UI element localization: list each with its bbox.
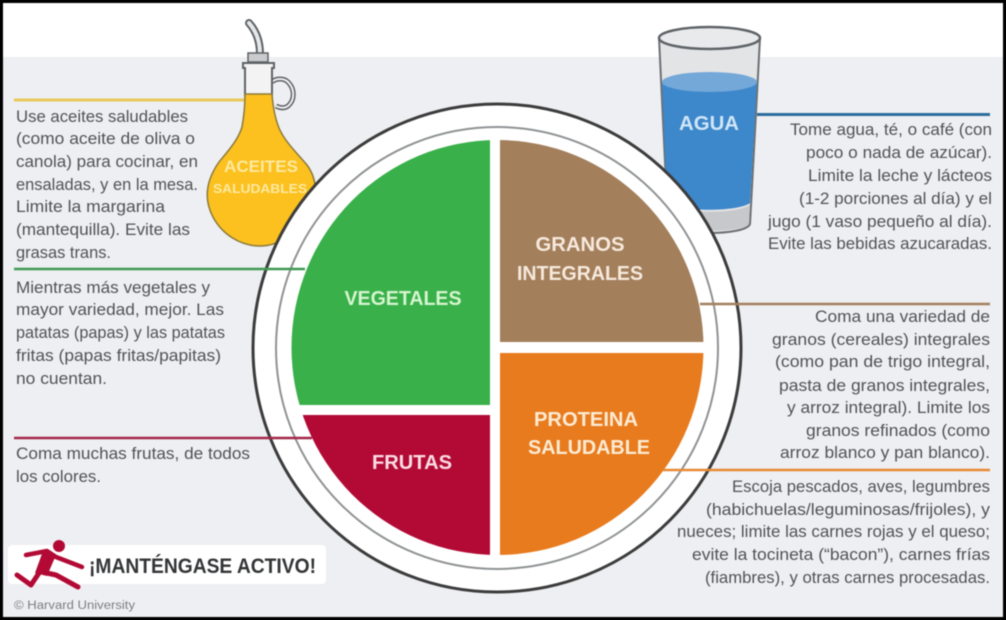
text: proteina: (habichuelas/leguminosas/frijoles), y <box>706 501 991 519</box>
text: aceites saludables: grasas trans. <box>16 244 111 262</box>
connector line: aceites <box>14 98 244 102</box>
text: aceites saludables: Use aceites saludables <box>16 108 188 126</box>
icon: oil bottle <box>207 23 316 246</box>
connector line: frutas <box>14 437 312 439</box>
text: proteina: Escoja pescados, aves, legumbres <box>732 478 990 496</box>
text: aceites saludables: canola) para cocinar, en <box>16 153 198 171</box>
connector line: granos <box>700 303 990 305</box>
text: frutas <box>16 445 250 486</box>
text: agua: Evite las bebidas azucaradas. <box>768 235 992 253</box>
text: agua: Tome agua, té, o café (con <box>790 121 992 139</box>
text: granos: granos refinados (como <box>806 422 990 440</box>
text: granos: pasta de granos integrales, <box>779 377 990 395</box>
text: agua: poco o nada de azúcar). <box>806 144 992 162</box>
text: vegetales: fritas (papas fritas/papitas) <box>16 347 221 365</box>
plate section: proteina saludable: PROTEINA <box>534 408 638 431</box>
text: proteina: (fiambres), y otras carnes procesadas. <box>705 569 990 587</box>
text: proteina: evite la tocineta (“bacon”), carnes frías <box>692 546 990 564</box>
text: vegetales: mayor variedad, mejor. Las <box>16 301 224 319</box>
text: aceites saludables <box>16 108 198 262</box>
icon: running person <box>17 540 82 587</box>
text: granos: Coma una variedad de <box>815 308 990 326</box>
connector line: proteina <box>663 469 990 471</box>
plate section: granos integrales <box>500 130 710 342</box>
plate <box>253 104 741 592</box>
callout: mantengase activo: ¡MANTÉNGASE ACTIVO! <box>89 555 316 578</box>
icon: glass of water <box>659 27 760 233</box>
text: copyright: © Harvard University <box>14 600 135 612</box>
plate section: frutas: FRUTAS <box>372 451 452 474</box>
text: granos: granos (cereales) integrales <box>772 331 990 349</box>
icon: glass of water: AGUA <box>679 112 739 135</box>
plate section: granos integrales: INTEGRALES <box>517 262 643 285</box>
plate section: frutas <box>302 414 491 556</box>
plate section: vegetales <box>285 130 490 405</box>
text: aceites saludables: Limite la margarina <box>16 198 166 216</box>
icon: oil bottle: ACEITES <box>224 157 298 176</box>
text: agua: Limite la leche y lácteos <box>808 167 992 185</box>
text: proteina: nueces; limite las carnes rojas y el queso; <box>677 523 990 541</box>
text: agua: (1-2 porciones al día) y el <box>799 190 992 208</box>
text: frutas: los colores. <box>16 468 101 486</box>
text: aceites saludables: (mantequilla). Evite las <box>16 221 190 239</box>
text: granos <box>772 308 990 462</box>
text: agua: jugo (1 vaso pequeño al día). <box>767 213 992 231</box>
text: vegetales <box>16 279 225 388</box>
text: granos: arroz blanco y pan blanco). <box>780 444 990 462</box>
text: granos: y arroz integral). Limite los <box>787 399 990 417</box>
text: vegetales: Mientras más vegetales y <box>16 279 211 297</box>
text: proteina <box>677 478 991 587</box>
text: aceites saludables: (como aceite de oliva o <box>16 130 195 148</box>
text: vegetales: no cuentan. <box>16 370 107 388</box>
text: aceites saludables: ensaladas, y en la mesa. <box>16 176 198 194</box>
connector line: vegetales <box>14 268 305 270</box>
plate section: proteina saludable <box>500 353 710 563</box>
callout: mantengase activo <box>8 540 326 587</box>
plate section: vegetales: VEGETALES <box>344 287 462 310</box>
text: granos: (como pan de trigo integral, <box>775 353 990 371</box>
text: vegetales: patatas (papas) y las patatas <box>16 324 225 342</box>
text: frutas: Coma muchas frutas, de todos <box>16 445 250 463</box>
connector line: agua <box>757 113 990 116</box>
icon: oil bottle: SALUDABLES <box>213 182 307 196</box>
plate section: granos integrales: GRANOS <box>536 233 624 256</box>
plate section: proteina saludable: SALUDABLE <box>528 436 650 459</box>
text: agua <box>767 121 992 253</box>
